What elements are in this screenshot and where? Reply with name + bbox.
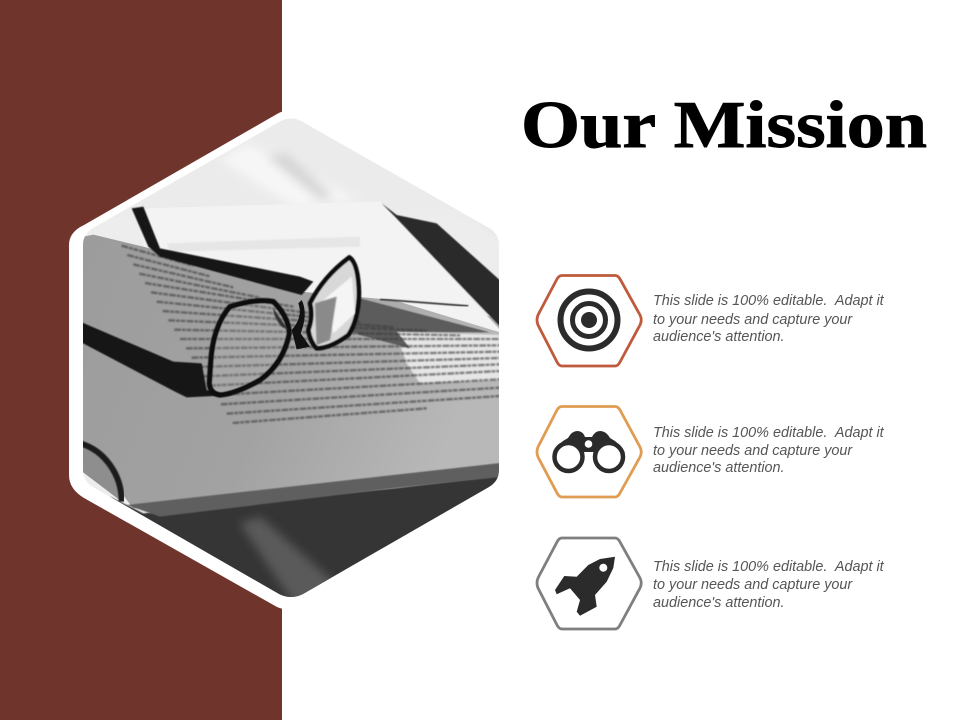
- photo: lens fold shade: [273, 308, 288, 330]
- text block 2: audience's attention.: [653, 460, 785, 476]
- photo: left lens: [209, 301, 289, 395]
- photo: lens reflection: [323, 277, 355, 333]
- photo: shadow of glasses: [352, 298, 490, 349]
- text block 2: to your needs and capture your: [653, 443, 853, 459]
- text block 3: audience's attention.: [653, 595, 785, 611]
- photo: lower left page under curl: [83, 446, 122, 502]
- photo: glasses bridge: [292, 300, 310, 349]
- photo: white sheet: [144, 246, 499, 332]
- photo background: blurred papers: [236, 152, 326, 198]
- icon: target rings: [560, 292, 618, 348]
- text block 1: to your needs and capture your: [653, 312, 853, 328]
- icon: target hexagon: [537, 276, 641, 366]
- photo: book edge: [127, 463, 503, 517]
- white hexagon frame: [69, 110, 512, 609]
- text block 1: This slide is 100% editable. Adapt it: [653, 293, 885, 309]
- photo: glasses on an open book: [83, 118, 499, 597]
- text block 2: This slide is 100% editable. Adapt it: [653, 425, 885, 441]
- photo: right lens: [308, 257, 359, 348]
- text block 3: to your needs and capture your: [653, 577, 853, 593]
- icon: binoculars: [553, 431, 625, 471]
- text block 1: audience's attention.: [653, 329, 785, 345]
- photo: table grain light: [240, 514, 333, 597]
- photo: dark strip: [382, 203, 503, 330]
- photo: printed text lines: [122, 246, 500, 423]
- photo: bright patch on page: [395, 332, 503, 383]
- photo: open book page: [80, 235, 503, 508]
- photo: glasses far temple arm: [80, 322, 233, 397]
- photo: dark curled page edge: [80, 443, 122, 502]
- photo: glasses near temple arm: [132, 207, 313, 295]
- icon: rocket: [555, 557, 615, 616]
- text block 3: This slide is 100% editable. Adapt it: [653, 559, 885, 575]
- icon: binoculars hexagon: [537, 406, 641, 497]
- panel: brown left band: [0, 0, 282, 720]
- item 3: rocket icon and text: [537, 538, 885, 629]
- title: Our Mission: [521, 88, 927, 162]
- photo: faint heading text on sheet: [167, 237, 360, 252]
- item 2: binoculars icon and text: [537, 406, 885, 497]
- photo: lens grey lower part: [315, 297, 337, 345]
- icon: rocket hexagon: [537, 538, 641, 629]
- item 1: target icon and text: [537, 276, 885, 366]
- photo: wooden table: [110, 475, 498, 597]
- photo: thin dark paper line: [380, 299, 468, 306]
